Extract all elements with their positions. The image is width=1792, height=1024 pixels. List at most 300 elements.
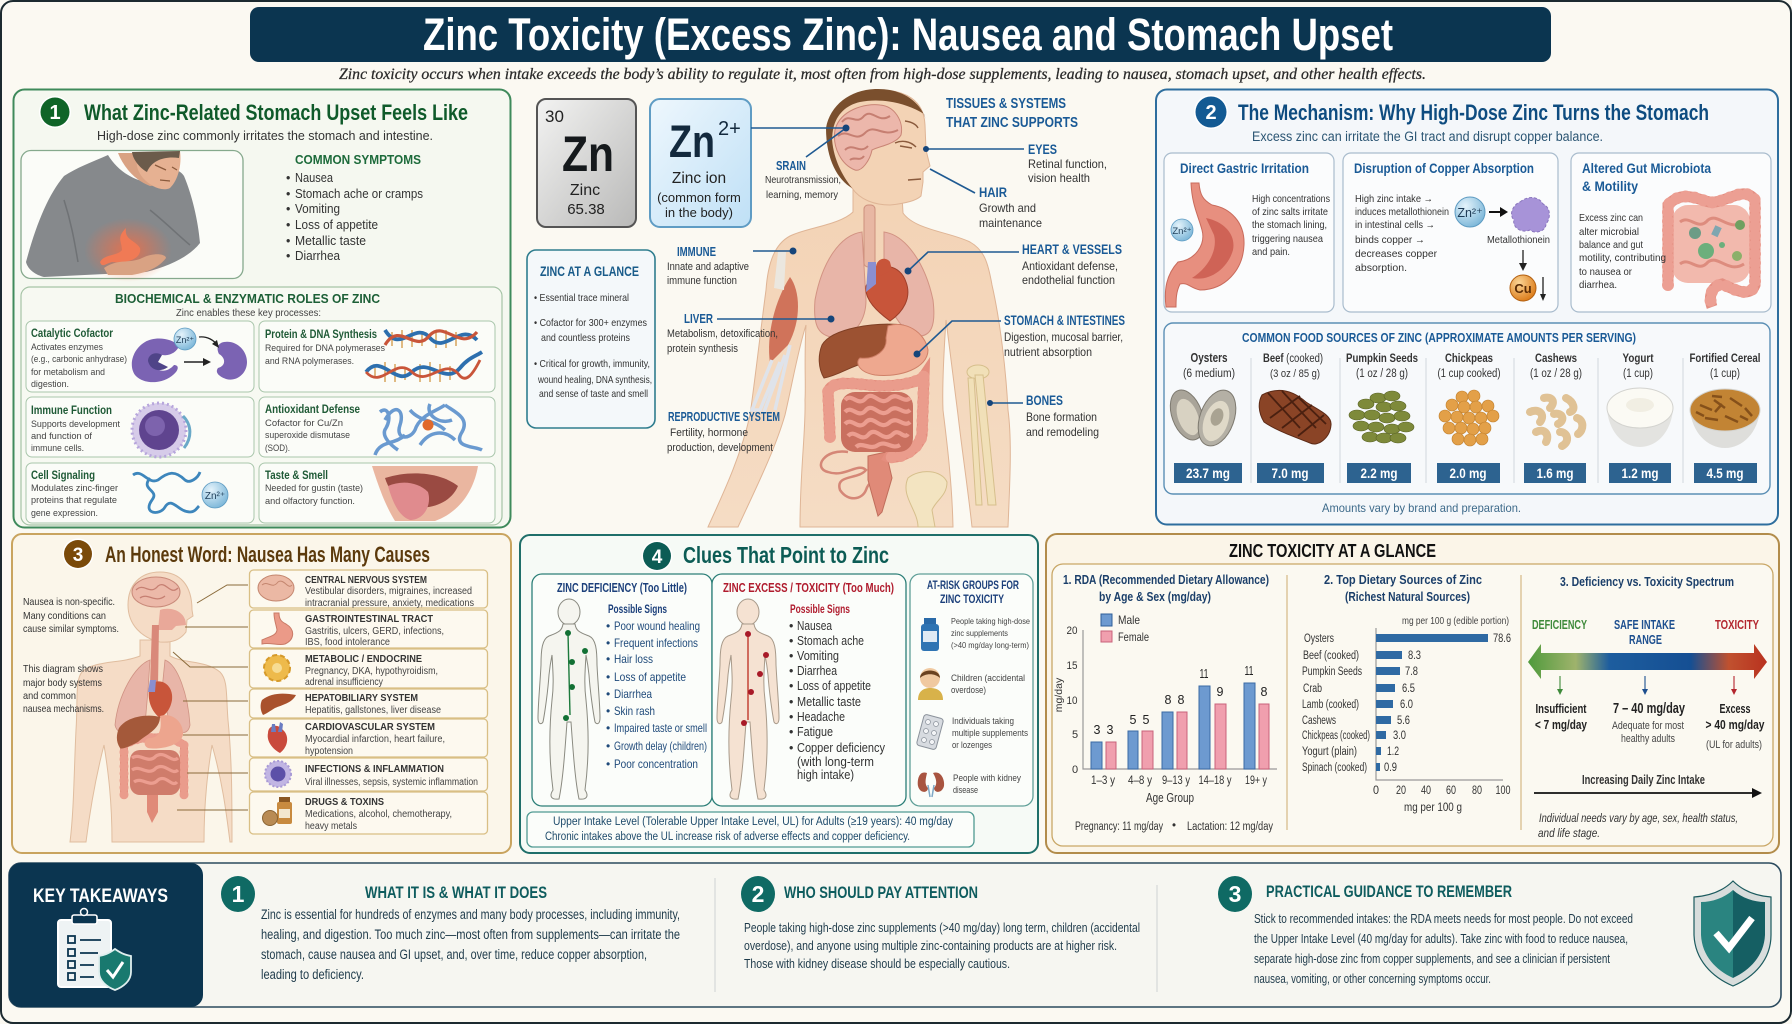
food dividers (1251, 358, 1683, 483)
zinc excess column: Diarrhea (797, 664, 837, 678)
zinc excess column: Nausea (797, 619, 832, 633)
chart: deficiency vs toxicity spectrum: Adequate for most (1612, 720, 1684, 732)
role: immune function: immune cells. (31, 443, 84, 454)
role: immune function: Immune Function (31, 405, 112, 417)
zinc excess column: Copper deficiency (797, 741, 886, 755)
tissues and systems heading: THAT ZINC SUPPORTS (946, 115, 1078, 131)
bar values: 8 (1261, 685, 1268, 699)
zinc deficiency column (532, 574, 712, 806)
ion card: Zn2+ (650, 99, 751, 227)
figure: stomach (858, 324, 928, 376)
chart: deficiency vs toxicity spectrum: RANGE (1629, 633, 1662, 647)
bar values: 3 (1094, 723, 1101, 737)
chart: deficiency vs toxicity spectrum (1528, 575, 1767, 840)
role: immune function: and function of (31, 431, 92, 442)
label: heart and vessels: HEART & VESSELS (1022, 242, 1122, 257)
takeaway 1 (221, 876, 680, 982)
food amount badges: 1.6 mg (1536, 465, 1574, 481)
chart: RDA by age and sex: 9–13 y (1162, 775, 1190, 787)
food: cashews (1530, 351, 1582, 446)
takeaway 3: Stick to recommended intakes: the RDA meets needs for most people. Do not exceed (1254, 911, 1633, 926)
at-risk: children: Children (accidental (951, 673, 1025, 684)
bar values (1094, 664, 1268, 737)
chart: top dietary sources: Cashews (1302, 715, 1336, 727)
legend (1101, 613, 1149, 644)
cause: drugs and toxins (250, 792, 488, 834)
chart: top dietary sources: Chickpeas (cooked) (1302, 730, 1370, 742)
card: direct gastric irritation: and pain. (1252, 246, 1290, 258)
chart: top dietary sources: 8.3 (1408, 650, 1421, 662)
element card: zinc (537, 99, 636, 227)
figure: small intestine (841, 392, 913, 452)
food: fortified cereal (1690, 351, 1760, 448)
zinc deficiency column: Possible Signs (608, 604, 667, 616)
food heading: COMMON FOOD SOURCES OF ZINC (APPROXIMATE AMOUNTS PER SERVING) (1242, 331, 1636, 345)
cause: metabolic / endocrine: METABOLIC / ENDOCRINE (305, 653, 422, 665)
cause: metabolic / endocrine: Pregnancy, DKA, hypothyroidism, (305, 666, 438, 677)
role: catalytic cofactor: (e.g., carbonic anhydrase) (31, 354, 127, 365)
zinc excess column: • (789, 619, 793, 633)
food: chickpeas (1438, 351, 1501, 446)
chart: RDA by age and sex: 10 (1066, 695, 1078, 707)
card: direct gastric irritation: of zinc salts irritate (1252, 206, 1328, 218)
label: brain (765, 158, 841, 201)
chart: deficiency vs toxicity spectrum: Individual needs vary by age, sex, health status, (1539, 811, 1738, 825)
zinc deficiency column: Skin rash (614, 704, 655, 718)
zinc excess column: • (789, 741, 793, 755)
card: altered gut microbiota and motility: motility, contributing (1579, 252, 1666, 264)
icon: shield with check (1694, 881, 1771, 986)
tissues and systems heading (946, 96, 1078, 131)
food: pumpkin seeds: Pumpkin Seeds (1346, 351, 1418, 365)
card: disruption of copper absorption: in intestinal cells → (1355, 219, 1435, 231)
panel 3 left note: Nausea is non-specific. (23, 596, 115, 608)
food: oysters: Oysters (1190, 351, 1228, 365)
label: liver: protein synthesis (667, 343, 738, 355)
label: immune: immune function (667, 275, 737, 287)
chart: top dietary sources: mg per 100 g (edible portion) (1402, 616, 1509, 627)
role: cell signaling: Cell Signaling (31, 470, 95, 482)
label: reproductive system (667, 410, 780, 454)
zinc deficiency column: Growth delay (children) (614, 739, 707, 753)
cause: central nervous system: CENTRAL NERVOUS SYSTEM (305, 574, 427, 586)
panel 3 left note: nausea mechanisms. (23, 703, 104, 715)
food: oysters: (6 medium) (1183, 368, 1235, 380)
element card: zinc: Zn (562, 126, 614, 182)
chart: top dietary sources: 5.6 (1397, 715, 1410, 727)
chart: RDA by age and sex: 5 (1072, 729, 1078, 741)
label: stomach and intestines: STOMACH & INTESTINES (1004, 313, 1125, 328)
card: altered gut microbiota and motility: balance and gut (1579, 239, 1643, 251)
card: altered gut microbiota and motility: diarrhea. (1579, 279, 1617, 291)
label: bones: and remodeling (1026, 425, 1099, 439)
zinc excess column: Headache (797, 710, 845, 724)
panel 1 heading: What Zinc-Related Stomach Upset Feels Like (84, 100, 468, 125)
zinc deficiency column: Hair loss (614, 652, 653, 666)
zinc at a glance box: and sense of taste and smell (539, 388, 648, 400)
chart: top dietary sources: 80 (1472, 785, 1482, 797)
ion card: Zn2+: in the body) (665, 205, 733, 220)
food: chickpeas: Chickpeas (1445, 351, 1493, 365)
role: antioxidant defense: (SOD). (265, 443, 290, 454)
element card: zinc: 65.38 (567, 201, 605, 218)
role: taste and smell: Needed for gustin (taste) (265, 483, 363, 494)
chart: RDA by age and sex: • (1172, 820, 1176, 832)
role: antioxidant defense: Cofactor for Cu/Zn (265, 418, 343, 429)
at-risk groups column (910, 574, 1033, 806)
chart: deficiency vs toxicity spectrum: Insufficient (1536, 701, 1587, 716)
number badge 1: 1 (49, 102, 61, 124)
label: hair: HAIR (979, 185, 1007, 200)
panel 3 left note: Many conditions can (23, 610, 106, 622)
role: immune function (26, 397, 254, 457)
role: catalytic cofactor: for metabolism and (31, 367, 105, 378)
zinc at a glance box: • Cofactor for 300+ enzymes (534, 317, 647, 329)
label: reproductive system: production, development (667, 442, 773, 454)
chart: RDA by age and sex: 14–18 y (1198, 775, 1232, 787)
takeaway 3 (1218, 876, 1633, 986)
label: eyes (1028, 142, 1107, 185)
takeaway 2: 2 (752, 881, 764, 907)
takeaway 2: WHO SHOULD PAY ATTENTION (784, 883, 978, 902)
card: disruption of copper absorption: Disruption of Copper Absorption (1354, 160, 1534, 176)
roles subheading: Zinc enables these key processes: (176, 307, 321, 319)
panel 4: clues that point to zinc (520, 535, 1038, 853)
chart: RDA by age and sex: 1. RDA (Recommended Dietary Allowance) (1063, 573, 1269, 587)
number badge 1 (39, 96, 71, 128)
zinc excess column (712, 574, 906, 806)
cause: cardiovascular system (250, 719, 488, 757)
role: protein and DNA synthesis (259, 321, 495, 392)
role: antioxidant defense (259, 397, 495, 457)
role: cell signaling (26, 463, 254, 523)
card: disruption of copper absorption: Zn²⁺ (1457, 206, 1483, 220)
chart: top dietary sources: 100 (1496, 785, 1510, 797)
card: altered gut microbiota and motility: & Motility (1582, 178, 1638, 194)
card: altered gut microbiota and motility: Excess zinc can (1579, 212, 1643, 224)
chart: top dietary sources: mg per 100 g (1404, 800, 1462, 814)
cause: infections and inflammation (250, 758, 488, 791)
female bars (1106, 704, 1269, 769)
label: immune: IMMUNE (677, 244, 716, 259)
food: fortified cereal: (1 cup) (1710, 368, 1740, 380)
zinc at a glance box: wound healing, DNA synthesis, (537, 374, 652, 386)
chart: top dietary sources (1302, 573, 1511, 814)
chart: RDA by age and sex: Lactation: 12 mg/day (1187, 821, 1273, 833)
label: hair: maintenance (979, 216, 1042, 230)
zinc at a glance box (527, 250, 655, 428)
zinc excess column: Fatigue (797, 725, 833, 739)
figure: brain (834, 105, 902, 170)
figure: face details (895, 121, 921, 180)
food: beef (1259, 353, 1331, 444)
legend: Male (1118, 613, 1140, 627)
label: stomach and intestines (1004, 313, 1125, 359)
element card: zinc: Zinc (570, 182, 600, 199)
label: bones: Bone formation (1026, 410, 1097, 424)
chart: top dietary sources: 40 (1421, 785, 1431, 797)
at-risk: kidney disease: disease (953, 785, 978, 796)
zinc deficiency column: • (606, 687, 610, 701)
roles heading: BIOCHEMICAL & ENZYMATIC ROLES OF ZINC (115, 292, 380, 306)
panel 3 left note: cause similar symptoms. (23, 623, 119, 635)
card: disruption of copper absorption (1343, 153, 1558, 312)
food: cashews: (1 oz / 28 g) (1530, 368, 1582, 380)
card: altered gut microbiota and motility: to nausea or (1579, 266, 1632, 278)
zinc excess column: • (789, 649, 793, 663)
figure: heart (866, 267, 908, 321)
bar values: 5 (1130, 713, 1137, 727)
label: bones: BONES (1026, 393, 1063, 408)
zinc deficiency column: Impaired taste or smell (614, 721, 707, 735)
takeaway divider 2 (1156, 885, 1158, 992)
takeaway 3: nausea, vomiting, or other concerning symptoms occur. (1254, 971, 1491, 986)
label: eyes: EYES (1028, 142, 1057, 157)
zinc deficiency column: • (606, 757, 610, 771)
chart: top dietary sources: 7.8 (1405, 666, 1418, 678)
panel 3 left note: and common (23, 690, 76, 702)
takeaway 2: People taking high-dose zinc supplements (>40 mg/day) long term, children (accidental (744, 920, 1140, 935)
bar values: 9 (1217, 685, 1224, 699)
chart: top dietary sources: Crab (1303, 683, 1322, 695)
label: hair (979, 185, 1042, 230)
chart: deficiency vs toxicity spectrum: and life stage. (1538, 826, 1600, 840)
chart: RDA by age and sex: 19+ y (1245, 775, 1267, 787)
label: stomach and intestines: nutrient absorption (1004, 345, 1092, 359)
at-risk groups column: AT-RISK GROUPS FOR (927, 580, 1020, 592)
food amount badges: 2.2 mg (1360, 465, 1398, 481)
zinc excess column: Stomach ache (797, 634, 864, 648)
number badge 4: 4 (652, 547, 663, 568)
key takeaways badge (9, 863, 203, 1007)
spectrum arrow (1528, 644, 1767, 679)
zinc deficiency column: • (606, 652, 610, 666)
zinc deficiency column: Loss of appetite (614, 670, 686, 684)
spectrum pointers (1557, 676, 1737, 695)
label: immune: Innate and adaptive (667, 261, 749, 273)
number badge 4 (642, 540, 672, 572)
role: antioxidant defense: Antioxidant Defense (265, 404, 360, 416)
at-risk: high-dose supplements: (>40 mg/day long-term) (951, 640, 1029, 650)
cause: central nervous system: Vestibular disorders, migraines, increased (305, 586, 472, 597)
common symptoms list: Stomach ache or cramps (295, 187, 423, 201)
cause: hepatobiliary system: Hepatitis, gallstones, liver disease (305, 705, 442, 716)
at-risk: multiple supplements: multiple supplements (952, 728, 1028, 739)
panel 2: the mechanism (1156, 90, 1778, 524)
zinc deficiency column: Poor wound healing (614, 619, 700, 633)
male bars (1091, 683, 1255, 769)
chart: top dietary sources: Lamb (cooked) (1302, 699, 1359, 711)
zinc excess column: • (789, 679, 793, 693)
tissues and systems heading: TISSUES & SYSTEMS (946, 96, 1066, 112)
card: disruption of copper absorption: binds copper → (1355, 234, 1425, 246)
chart: top dietary sources: 6.0 (1400, 699, 1413, 711)
zinc deficiency column: Diarrhea (614, 687, 652, 701)
panel 3 left note (23, 596, 119, 715)
food amount badges: 7.0 mg (1272, 465, 1308, 481)
chart: top dietary sources: Beef (cooked) (1303, 650, 1359, 662)
chart: RDA by age and sex: 20 (1066, 625, 1078, 637)
food: pumpkin seeds: (1 oz / 28 g) (1356, 368, 1408, 380)
common symptoms list: • (286, 202, 290, 216)
role: cell signaling: proteins that regulate (31, 495, 117, 506)
card: altered gut microbiota and motility: Altered Gut Microbiota (1582, 160, 1711, 176)
chart: top dietary sources: 1.2 (1387, 746, 1399, 758)
card: altered gut microbiota and motility (1571, 153, 1771, 312)
figure: hair (826, 89, 926, 188)
key takeaways badge: KEY TAKEAWAYS (33, 886, 168, 907)
ion card: Zn2+: Zinc ion (672, 170, 726, 187)
figure: reproductive tract (821, 451, 884, 498)
chart: deficiency vs toxicity spectrum: Excess (1720, 701, 1750, 716)
card: disruption of copper absorption: Cu (1514, 281, 1532, 296)
role: protein and DNA synthesis: Required for DNA polymerases (265, 343, 385, 354)
takeaway divider 1 (714, 878, 716, 992)
anatomy figure, small (70, 572, 232, 842)
upper intake level note: Upper Intake Level (Tolerable Upper Intake Level, UL) for Adults (≥19 years): 40 mg/day (553, 816, 953, 828)
takeaway 1: leading to deficiency. (261, 967, 364, 982)
food amount badges: 2.0 mg (1450, 465, 1486, 481)
label: eyes: Retinal function, (1028, 157, 1107, 171)
chart: deficiency vs toxicity spectrum: Increasing Daily Zinc Intake (1582, 773, 1705, 787)
at-risk: multiple supplements: or lozenges (952, 740, 992, 751)
figure: head (832, 90, 930, 205)
zinc at a glance box: • Critical for growth, immunity, (534, 358, 650, 370)
bar values: 8 (1178, 693, 1185, 707)
zinc deficiency column: • (606, 739, 610, 753)
at-risk: kidney disease: People with kidney (953, 773, 1021, 784)
chart: deficiency vs toxicity spectrum: TOXICITY (1715, 618, 1760, 632)
cause: hepatobiliary system: HEPATOBILIARY SYSTEM (305, 692, 418, 704)
food amount badges: 1.2 mg (1622, 465, 1658, 481)
common symptoms list: • (286, 171, 290, 185)
number badge 2: 2 (1205, 102, 1217, 124)
chart: top dietary sources: 3.0 (1393, 730, 1406, 742)
label: liver: LIVER (684, 311, 713, 326)
at-risk: high-dose supplements (921, 616, 1030, 651)
chart: deficiency vs toxicity spectrum: healthy adults (1621, 733, 1675, 745)
number badge 3 (62, 538, 94, 570)
at-risk groups column: ZINC TOXICITY (940, 594, 1004, 606)
role: protein and DNA synthesis: Protein & DNA Synthesis (265, 329, 377, 341)
common symptoms list: Metallic taste (295, 234, 366, 248)
cause: central nervous system: intracranial pressure, anxiety, medications (305, 598, 474, 609)
zinc excess column: ZINC EXCESS / TOXICITY (Too Much) (723, 581, 894, 595)
zinc at a glance box: and countless proteins (541, 332, 630, 344)
common symptoms list: Nausea (295, 171, 333, 185)
cause: gastrointestinal tract (250, 610, 488, 648)
zinc excess column: • (789, 634, 793, 648)
biochemical and enzymatic roles box (21, 287, 502, 525)
label: liver: Metabolism, detoxification, (667, 328, 778, 340)
cause: gastrointestinal tract: Gastritis, ulcers, GERD, infections, (305, 626, 444, 637)
card: altered gut microbiota and motility: alter microbial (1579, 226, 1639, 238)
chart: top dietary sources: 0.9 (1384, 762, 1397, 774)
callout lines with dots (717, 124, 1024, 406)
zinc excess column: (with long-term (797, 755, 874, 769)
zinc deficiency column: • (606, 619, 610, 633)
cause: metabolic / endocrine: adrenal insufficiency (305, 677, 383, 688)
figure: large intestine (828, 376, 924, 457)
food: beef: (3 oz / 85 g) (1270, 368, 1320, 380)
zinc at a glance box: • Essential trace mineral (534, 292, 629, 304)
cause: gastrointestinal tract: GASTROINTESTINAL TRACT (305, 613, 434, 625)
zinc deficiency column: Poor concentration (614, 757, 698, 771)
label: brain: Neurotransmission, (765, 174, 841, 186)
icon: clipboard with shield (58, 908, 131, 990)
chart: top dietary sources: Pumpkin Seeds (1302, 666, 1362, 678)
cause: central nervous system (250, 570, 488, 609)
takeaway 1: WHAT IT IS & WHAT IT DOES (365, 883, 547, 902)
cause: infections and inflammation: Viral illnesses, sepsis, systemic inflammation (305, 777, 478, 788)
label: immune (667, 244, 749, 287)
role: taste and smell (259, 463, 495, 523)
zinc excess column: Vomiting (797, 649, 839, 663)
panel 3: an honest word (12, 534, 511, 853)
role: taste and smell: Taste & Smell (265, 470, 328, 482)
zinc deficiency column: • (606, 636, 610, 650)
legend: Female (1118, 630, 1149, 644)
chart: deficiency vs toxicity spectrum: DEFICIENCY (1532, 618, 1587, 632)
cause: cardiovascular system: CARDIOVASCULAR SYSTEM (305, 721, 435, 733)
panel 5: zinc toxicity at a glance (1046, 534, 1779, 853)
takeaway 3: separate high-dose zinc from copper supplements, and see a clinician if persistent (1254, 951, 1610, 966)
food: yogurt: (1 cup) (1623, 368, 1653, 380)
food: fortified cereal: Fortified Cereal (1690, 351, 1760, 365)
takeaway 2 (741, 876, 1140, 971)
zinc excess column: high intake) (797, 768, 854, 782)
cause: metabolic / endocrine (250, 649, 488, 688)
role: cell signaling: Modulates zinc-finger (31, 483, 118, 494)
figure: rectum (868, 452, 892, 516)
takeaway 3: PRACTICAL GUIDANCE TO REMEMBER (1266, 882, 1512, 901)
food footnote: Amounts vary by brand and preparation. (1322, 501, 1521, 515)
figure: arm muscle (769, 277, 798, 363)
number badge 2 (1194, 95, 1228, 129)
chart: deficiency vs toxicity spectrum: 7 – 40 mg/day (1613, 700, 1685, 717)
card: disruption of copper absorption: Metallothionein (1487, 235, 1550, 246)
intake arrow (1534, 788, 1762, 798)
chart: RDA by age and sex: 4–8 y (1128, 775, 1152, 787)
upper intake level note (527, 812, 974, 847)
role: catalytic cofactor (26, 321, 254, 392)
card: direct gastric irritation: triggering nausea (1252, 233, 1323, 245)
at-risk: multiple supplements (916, 714, 1028, 751)
subtitle: Zinc toxicity occurs when intake exceeds the body’s ability to regulate it, most often from high-dose supplements, leading to nausea, stomach upset, and other health effects. (339, 66, 1426, 83)
at-risk: multiple supplements: Individuals taking (952, 716, 1014, 727)
label: brain: SRAIN (776, 158, 806, 173)
chart: deficiency vs toxicity spectrum: (UL for adults) (1706, 739, 1762, 751)
chart: top dietary sources: Spinach (cooked) (1302, 762, 1367, 774)
panel 3 heading: An Honest Word: Nausea Has Many Causes (105, 542, 430, 567)
card: disruption of copper absorption: decreases copper (1355, 248, 1437, 260)
panel 5 dividers (1287, 575, 1521, 830)
zinc excess column: • (789, 664, 793, 678)
zinc deficiency column: • (606, 721, 610, 735)
chart: RDA by age and sex: mg/day (1053, 677, 1065, 712)
chart: RDA by age and sex: Age Group (1146, 790, 1194, 805)
figure: liver (819, 324, 903, 378)
zinc deficiency column: Frequent infections (614, 636, 698, 650)
common symptoms list: • (286, 218, 290, 232)
figure: trachea (864, 205, 875, 267)
chart: top dietary sources: 60 (1446, 785, 1456, 797)
chart: RDA by age and sex: 1–3 y (1091, 775, 1115, 787)
zinc excess column: Loss of appetite (797, 679, 871, 693)
at-risk: high-dose supplements: zinc supplements (951, 628, 1008, 638)
cause: cardiovascular system: Myocardial infarction, heart failure, (305, 734, 445, 745)
food amount badges: 23.7 mg (1186, 465, 1230, 481)
